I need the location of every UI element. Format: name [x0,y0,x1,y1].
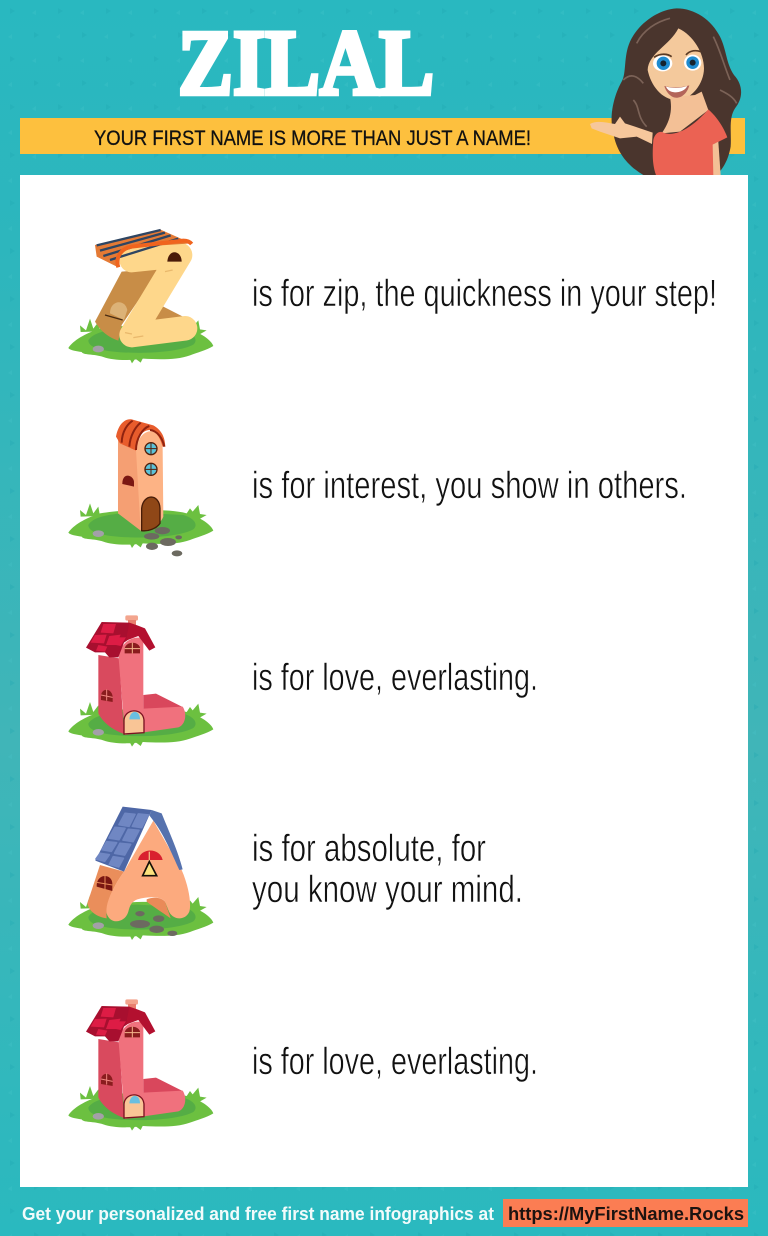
text: A line: is for absolute, for [252,828,486,870]
text: L line: is for love, everlasting. [252,657,538,699]
footer: url badge: https://MyFirstName.Rocks [508,1203,744,1224]
text: second L line: is for love, everlasting. [252,1041,538,1083]
text: A line [252,828,523,911]
footer: call to action: Get your personalized and free first name infographics at [22,1204,494,1224]
banner: tagline: YOUR FIRST NAME IS MORE THAN JUST A NAME! [94,126,531,150]
panel: content [20,175,748,1187]
icon: A house [68,807,213,940]
icon: second L house [68,999,213,1131]
icon: I house [68,419,213,556]
illustration: woman presenter [590,8,741,175]
title: ZILAL [178,12,434,115]
icon: L house [68,615,213,747]
icon: Z house [68,229,213,363]
banner: tagline [20,118,745,154]
text: A line: you know your mind. [252,869,523,911]
